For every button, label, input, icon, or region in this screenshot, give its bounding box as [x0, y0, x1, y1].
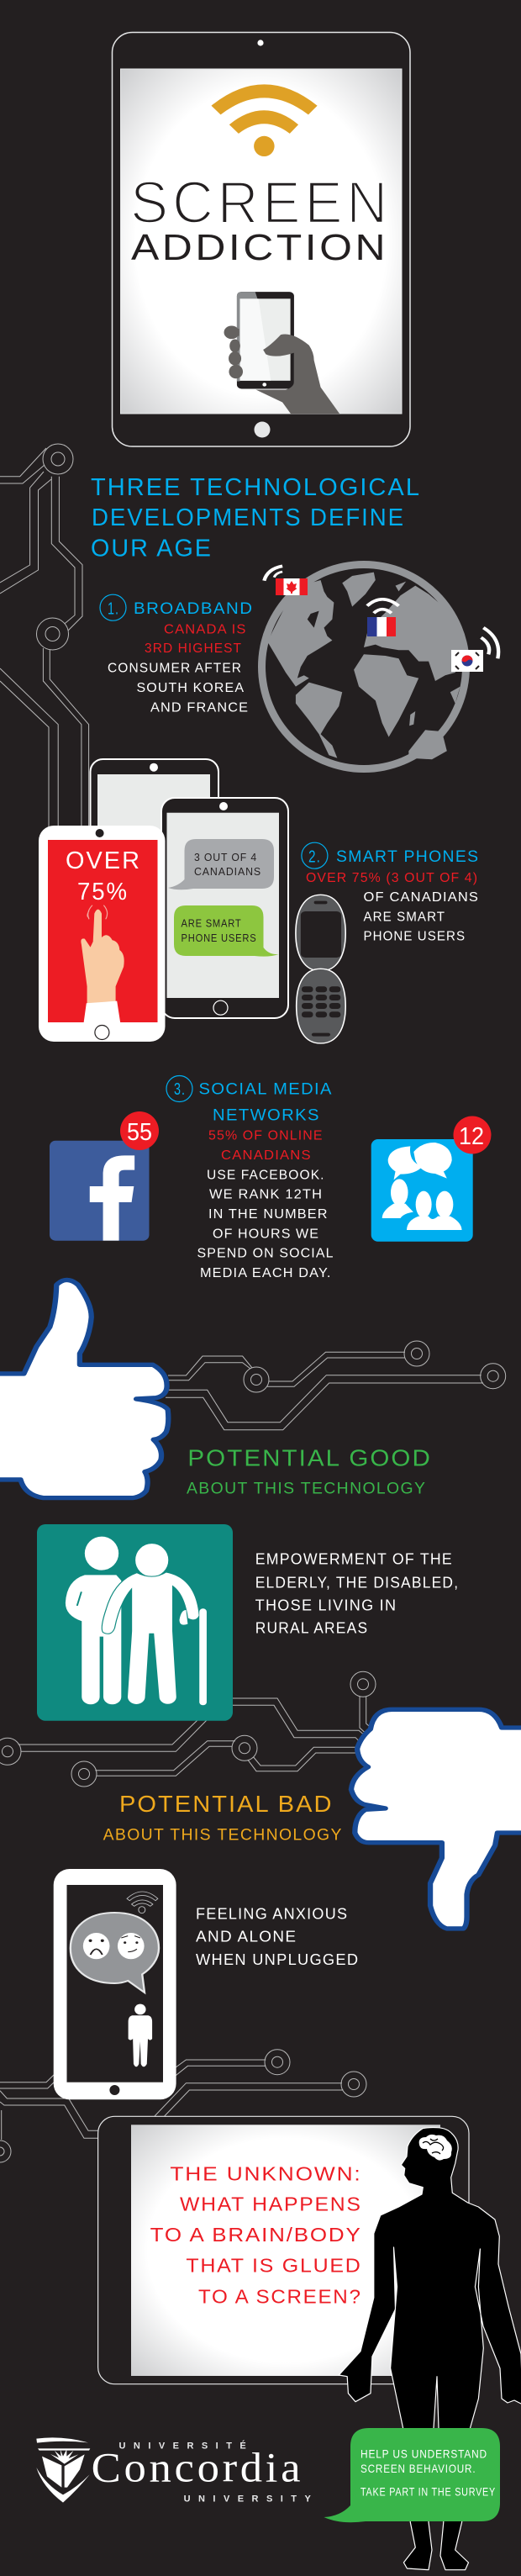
callout: take part in the survey: HELP US UNDERSTAND	[360, 2447, 487, 2460]
text block: smart phones	[302, 842, 479, 944]
circuit traces: upper left	[0, 444, 89, 828]
icon: pointing hand	[81, 905, 124, 1022]
speech bubble with faces	[71, 1913, 159, 1993]
text block: empowerment: EMPOWERMENT OF THE	[255, 1551, 453, 1568]
text block: smart phones: OF CANADIANS	[363, 890, 479, 905]
devices illustration	[39, 759, 345, 1043]
number badge 3	[166, 1076, 192, 1101]
badge: 55	[120, 1111, 159, 1150]
icon: phone with anxious faces	[54, 1869, 176, 2099]
badge: 12: 12	[459, 1123, 484, 1150]
badge: 55: 55	[127, 1119, 152, 1146]
text block: smart phones: ARE SMART	[363, 910, 445, 924]
text block: broadband: 3RD HIGHEST	[145, 641, 242, 656]
title	[130, 169, 392, 268]
heading: three developments: THREE TECHNOLOGICAL	[91, 474, 421, 501]
bubble: 3 out of 4: 3 OUT OF 4	[194, 851, 257, 863]
text block: broadband: BROADBAND	[134, 599, 253, 618]
heading: potential bad: POTENTIAL BAD	[119, 1791, 333, 1817]
text block: social media: CANADIANS	[221, 1148, 312, 1163]
logo: Concordia University: UNIVERSITY	[184, 2494, 312, 2505]
text block: social media: WE RANK 12TH	[209, 1188, 323, 1202]
text block: the unknown: THAT IS GLUED	[186, 2255, 362, 2277]
heading: three developments: OUR AGE	[91, 536, 213, 562]
flag: Canada	[276, 578, 308, 595]
text block: broadband	[100, 594, 253, 715]
icon: facebook app	[50, 1111, 159, 1241]
icon: brain	[419, 2135, 452, 2161]
number badge 1: 1.	[108, 600, 119, 619]
icon: thumbs down	[351, 1709, 521, 1929]
circuit traces: around lower phone	[0, 2050, 366, 2162]
silhouette with brain	[339, 2127, 521, 2570]
text block: the unknown: TO A SCREEN?	[198, 2285, 362, 2307]
icon: flip phone	[296, 895, 345, 1043]
text block: smart phones: PHONE USERS	[363, 930, 466, 944]
text block: social media: MEDIA EACH DAY.	[200, 1266, 331, 1280]
circuit traces: between good and bad sections	[0, 1671, 376, 1787]
text block: anxious: AND ALONE	[196, 1929, 297, 1945]
flag: South Korea	[451, 650, 483, 672]
text block: social media: OF HOURS WE	[213, 1227, 319, 1241]
title: SCREEN	[130, 169, 392, 235]
number badge 3: 3.	[174, 1080, 186, 1099]
bubble: 3 out of 4	[168, 839, 274, 889]
text block: anxious: WHEN UNPLUGGED	[196, 1951, 359, 1968]
text block: social media	[166, 1076, 334, 1280]
text block: social media: USE FACEBOOK.	[207, 1168, 325, 1182]
middle phone	[161, 798, 288, 1018]
number badge 1	[100, 594, 126, 620]
callout: take part in the survey	[324, 2428, 500, 2522]
text block: the unknown: TO A BRAIN/BODY	[150, 2224, 362, 2246]
number badge 2: 2.	[308, 847, 321, 866]
text block: the unknown	[150, 2162, 362, 2307]
small wifi	[127, 1892, 158, 1914]
text block: anxious: FEELING ANXIOUS	[196, 1905, 348, 1922]
circuit traces: right of thumbs up	[166, 1341, 506, 1430]
text block: empowerment: ELDERLY, THE DISABLED,	[255, 1574, 459, 1591]
text block: anxious	[196, 1905, 359, 1968]
front phone with red screen: 75%	[77, 879, 129, 905]
icon: hand holding phone	[224, 292, 339, 414]
heading: three developments	[91, 474, 421, 562]
text block: social media: SOCIAL MEDIA	[198, 1080, 333, 1099]
title: ADDICTION	[131, 227, 388, 268]
text block: the unknown: WHAT HAPPENS	[180, 2193, 362, 2214]
icon: thumbs up	[0, 1280, 168, 1498]
text block: social media: IN THE NUMBER	[208, 1207, 329, 1222]
front phone with red screen: OVER	[66, 847, 141, 874]
bubble: are smart phone users: PHONE USERS	[182, 932, 257, 944]
text block: broadband: AND FRANCE	[150, 700, 249, 715]
number badge 2	[302, 842, 328, 868]
icon: elderly and helper	[37, 1524, 233, 1721]
icon: wifi	[211, 84, 318, 156]
callout: take part in the survey: SCREEN BEHAVIOUR.	[360, 2463, 476, 2475]
shield crest	[36, 2437, 90, 2503]
heading: potential good	[187, 1444, 432, 1498]
bottom tablet	[98, 2116, 469, 2384]
heading: potential good: POTENTIAL GOOD	[187, 1444, 432, 1470]
hero tablet	[113, 32, 410, 446]
text block: broadband: SOUTH KOREA	[136, 681, 245, 695]
front phone with red screen	[39, 826, 165, 1042]
text block: empowerment: RURAL AREAS	[255, 1620, 368, 1637]
bubble: 3 out of 4: CANADIANS	[194, 865, 261, 878]
heading: three developments: DEVELOPMENTS DEFINE	[92, 504, 405, 531]
flag: France	[367, 617, 396, 636]
back tablet	[91, 759, 218, 864]
badge: 12	[454, 1116, 491, 1153]
text block: empowerment	[255, 1551, 459, 1637]
icon: globe with flags	[258, 561, 498, 773]
icon: social network app	[371, 1116, 491, 1242]
text block: social media: SPEND ON SOCIAL	[197, 1247, 334, 1261]
lone person	[129, 2004, 152, 2067]
text block: broadband: CANADA IS	[164, 622, 247, 636]
text block: empowerment: THOSE LIVING IN	[255, 1597, 397, 1613]
signal arcs	[264, 566, 498, 658]
text block: smart phones: SMART PHONES	[336, 847, 479, 866]
heading: potential bad	[103, 1791, 343, 1844]
logo: Concordia University: UNIVERSITÉ	[119, 2440, 247, 2451]
heading: potential good: ABOUT THIS TECHNOLOGY	[187, 1481, 426, 1498]
text block: smart phones: OVER 75% (3 OUT OF 4)	[306, 871, 478, 885]
bubble: are smart phone users	[174, 905, 279, 957]
bubble: are smart phone users: ARE SMART	[182, 917, 242, 930]
text block: the unknown: THE UNKNOWN:	[170, 2162, 362, 2184]
text block: broadband: CONSUMER AFTER	[108, 662, 242, 676]
logo: Concordia University: Concordia	[92, 2444, 303, 2491]
tablet screen	[121, 69, 402, 414]
logo: Concordia University	[36, 2437, 312, 2505]
text block: social media: 55% OF ONLINE	[208, 1129, 324, 1143]
heading: potential bad: ABOUT THIS TECHNOLOGY	[103, 1826, 343, 1844]
text block: social media: NETWORKS	[213, 1106, 320, 1124]
